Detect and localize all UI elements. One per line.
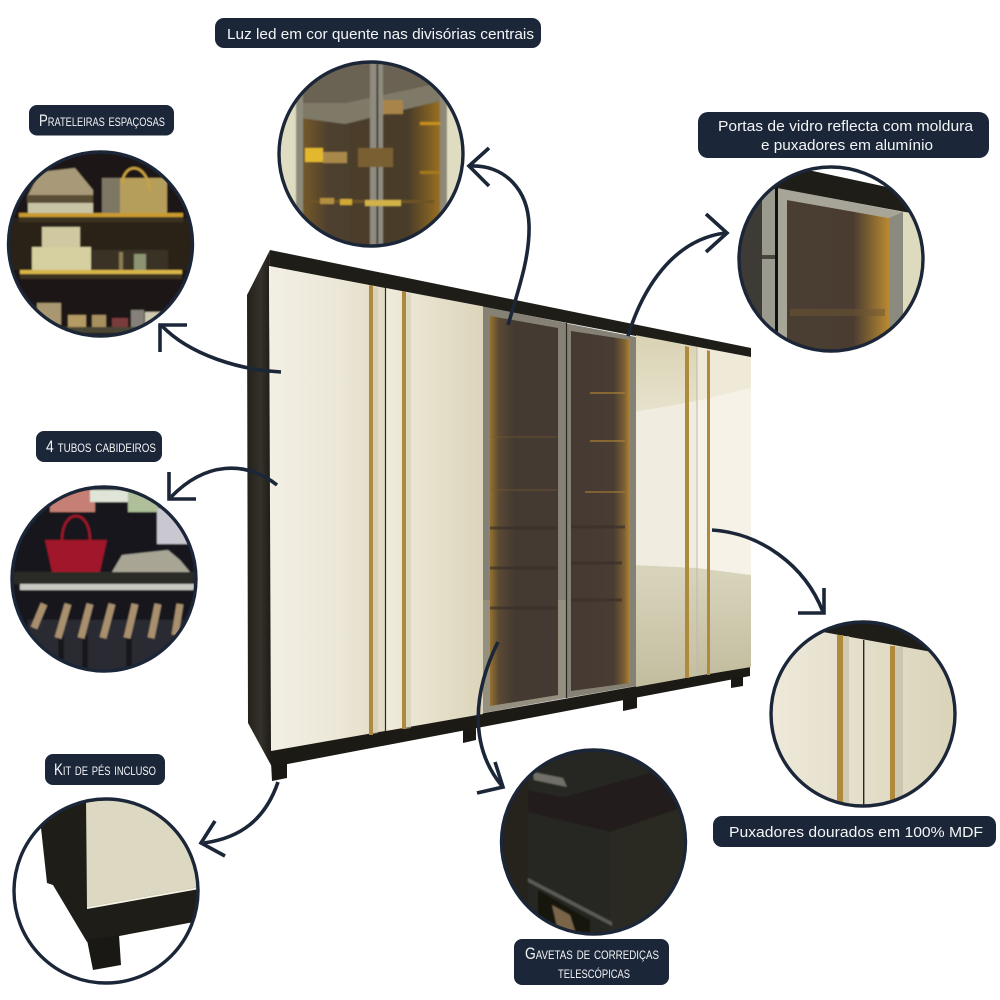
arrow: gavetas	[477, 642, 503, 793]
label: tubos	[36, 431, 162, 462]
gold handles	[369, 285, 710, 735]
arrow: portas	[628, 214, 727, 336]
label: kit de pes	[45, 754, 165, 785]
white doors right	[636, 335, 751, 687]
glass door left	[483, 306, 566, 713]
label: tubos: 4 tubos cabideiros	[46, 437, 156, 456]
photo circle: puxadores	[768, 618, 960, 812]
label: portas de vidro: e puxadores em alumínio	[761, 137, 933, 154]
glass door right	[566, 323, 636, 698]
label: luz led: Luz led em cor quente nas divisórias centrais	[227, 26, 534, 43]
label: kit de pes: Kit de pés incluso	[54, 760, 156, 779]
label: gavetas: Gavetas de corrediças	[525, 944, 659, 963]
wardrobe	[247, 250, 751, 781]
label: portas de vidro: Portas de vidro reflecta com moldura	[718, 118, 974, 135]
arrow: kit de pes	[201, 782, 278, 856]
arrow: tubos	[169, 468, 277, 499]
wardrobe body	[247, 250, 751, 767]
arrow: puxadores	[712, 530, 824, 613]
photo circle: kit de pes	[10, 795, 205, 987]
label: puxadores: Puxadores dourados em 100% MDF	[729, 824, 983, 841]
wardrobe feet	[271, 674, 743, 781]
label: luz led	[215, 18, 541, 48]
photo circle: portas de vidro	[730, 164, 930, 358]
label: puxadores	[713, 816, 996, 847]
label: portas de vidro	[698, 112, 989, 158]
white doors left	[269, 266, 483, 751]
photo circle: prateleiras	[5, 148, 197, 340]
arrow: prateleiras	[160, 325, 281, 372]
label: gavetas	[514, 939, 669, 985]
photo circle: tubos	[8, 483, 200, 676]
photo circle: gavetas	[498, 745, 690, 940]
label: prateleiras: Prateleiras espaçosas	[39, 111, 165, 130]
arrow: luz led	[469, 148, 529, 325]
label: gavetas: telescópicas	[558, 963, 630, 982]
label: prateleiras	[29, 105, 174, 136]
photo circle: luz led	[276, 60, 466, 250]
